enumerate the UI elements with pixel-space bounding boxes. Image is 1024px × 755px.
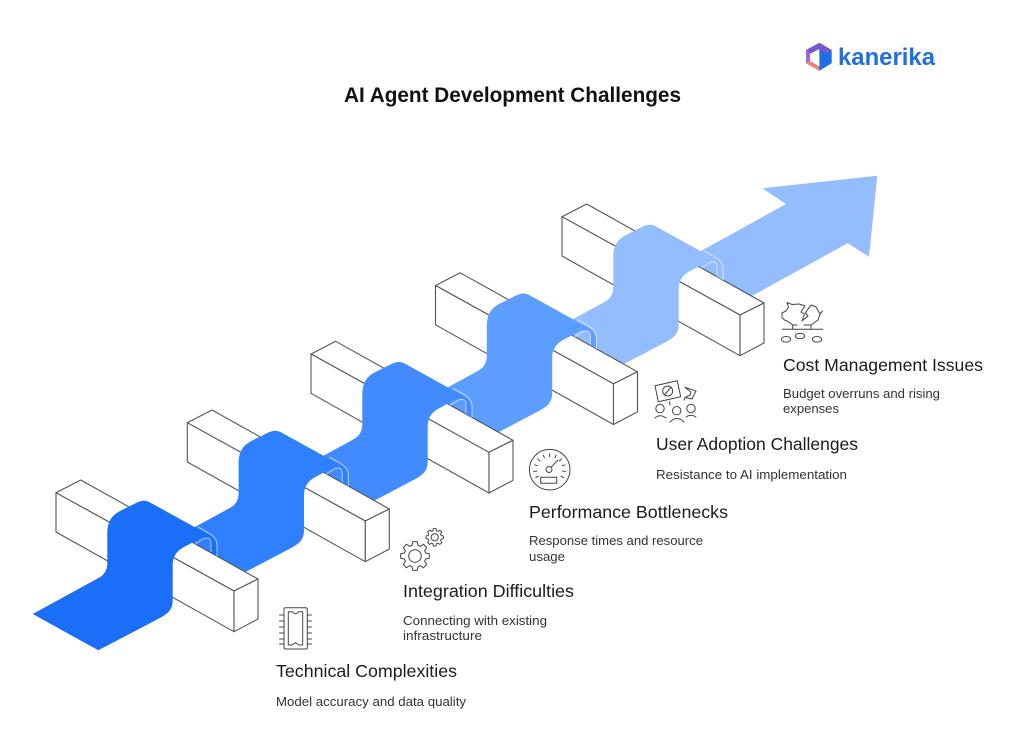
heading: Cost Management Issues: [783, 355, 983, 375]
block 5: [562, 204, 764, 356]
logo wordmark: kanerika: [838, 44, 936, 71]
description: Budget overruns and rising: [783, 386, 940, 401]
description: Resistance to AI implementation: [656, 467, 847, 482]
icon: chip: [280, 608, 312, 649]
heading: Integration Difficulties: [403, 581, 574, 601]
heading: Performance Bottlenecks: [529, 502, 728, 522]
block 1: [56, 480, 258, 632]
step 3: block and ribbon: [288, 341, 513, 512]
label: integration difficulties: infrastructure: [403, 628, 482, 643]
ribbon 3: [288, 362, 472, 512]
logo: kanerika: [806, 43, 936, 71]
ribbon 2: [164, 431, 348, 580]
label: cost management issues: expenses: [783, 401, 839, 416]
description: Model accuracy and data quality: [276, 694, 467, 709]
title: AI Agent Development Challenges: [344, 83, 681, 107]
label: performance bottlenecks: usage: [529, 549, 565, 564]
ribbon 1: [33, 501, 217, 650]
block 3: [311, 341, 513, 493]
ribbon 5: [539, 225, 723, 374]
heading: Technical Complexities: [276, 661, 457, 681]
label: integration difficulties: [401, 529, 574, 643]
icon: logo cube: [806, 43, 832, 71]
icon: gauge: [529, 449, 570, 490]
label: cost management issues: [781, 302, 983, 416]
description: Connecting with existing: [403, 613, 547, 628]
icon: broken piggy bank: [781, 302, 823, 342]
ribbon 4: [412, 294, 596, 443]
description: Response times and resource: [529, 533, 703, 548]
step 4: block and ribbon: [412, 273, 638, 443]
block 2: [187, 410, 389, 562]
step 1: block and ribbon: [33, 480, 258, 650]
icon: gears: [401, 529, 443, 570]
arrow head and shaft: [690, 176, 877, 308]
heading: User Adoption Challenges: [656, 434, 858, 454]
icon: protest crowd: [655, 381, 696, 422]
step 5: block and ribbon: [539, 204, 764, 374]
label: performance bottlenecks: [529, 449, 728, 564]
label: technical complexities: [276, 608, 467, 709]
label: user adoption challenges: [655, 381, 858, 482]
block 4: [436, 273, 638, 424]
step 2: block and ribbon: [164, 410, 389, 580]
